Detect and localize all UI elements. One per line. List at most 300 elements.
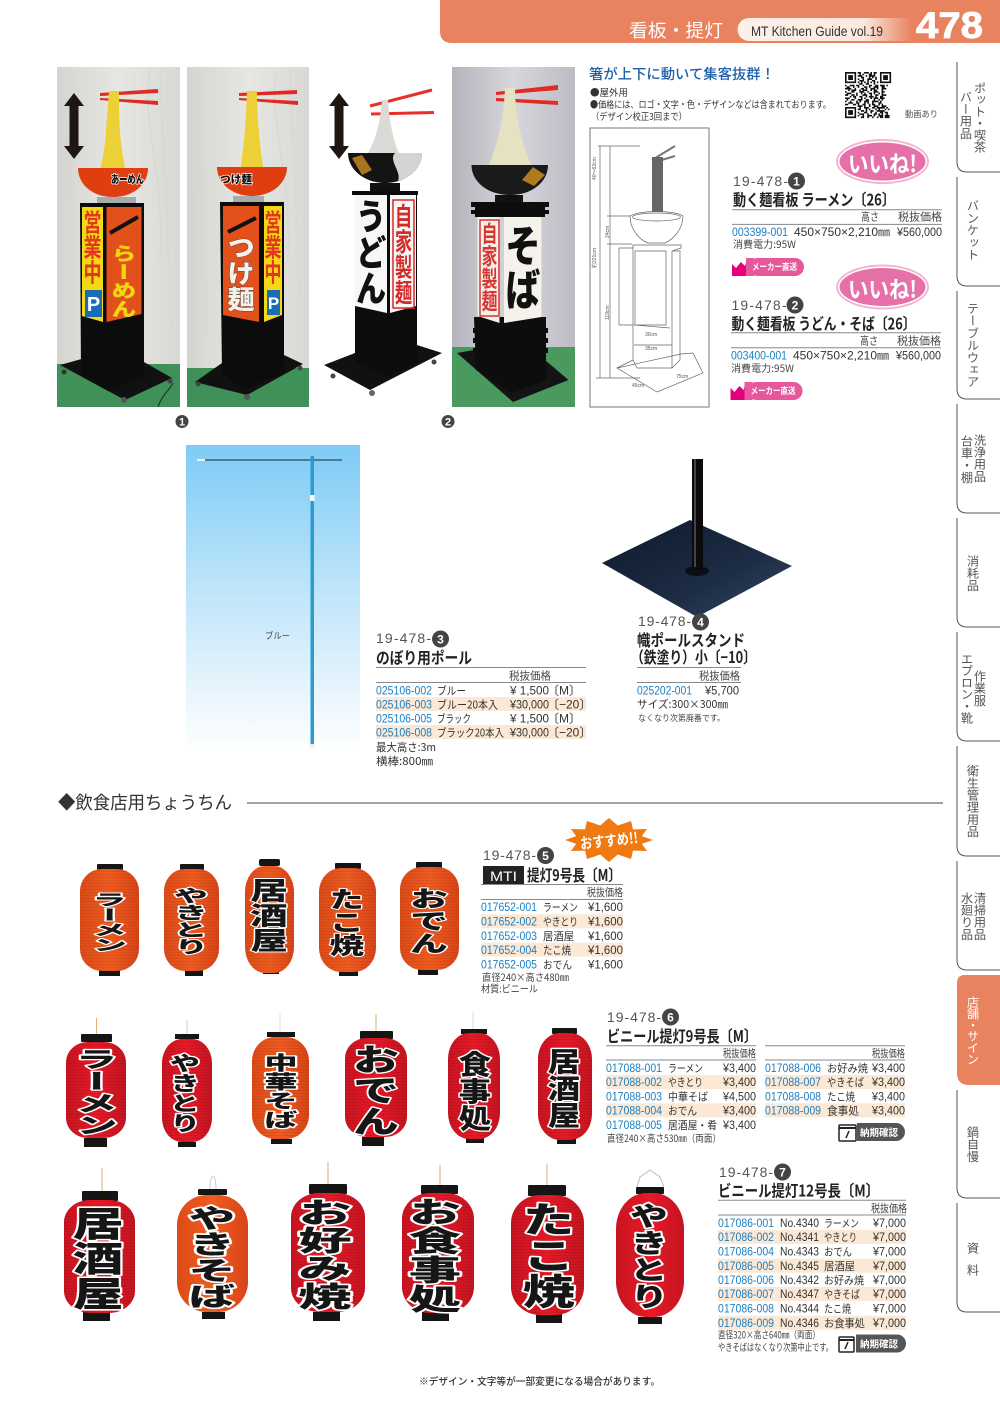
price table left: やきとり [668,1074,703,1090]
chopsticks [370,90,434,114]
item number: 1 [793,174,800,188]
price table: 025202-001 [637,684,692,698]
lantern: izakaya red [538,1028,592,1144]
notes: ●屋外用 [590,85,628,99]
price table: おでん [543,956,572,972]
price table: 003400-001 [731,348,787,362]
bowl [78,168,148,197]
photo: udon sign on white: うどん [349,198,393,306]
price table right: 食事処 [827,1102,859,1118]
price table [732,208,942,251]
notes: （デザイン校正3回まで） [591,109,687,123]
badge: iine 2: いいね! [848,270,917,304]
item number: 7 [779,1166,786,1180]
price table left: ラーメン [668,1060,703,1076]
price table: 017652-003 [481,929,537,943]
marker 1 [176,415,188,428]
price table: お好み焼 [824,1272,864,1288]
notes: ●価格には、ロゴ・文字・色・デザインなどは含まれております。 [590,97,831,111]
product title: 動く麺看板 ラーメン〔26〕 [733,186,895,210]
lantern: yakitori large [616,1170,684,1324]
price table: ¥7,000 [872,1316,906,1330]
lantern: takoyaki large: たこ焼 [511,1201,587,1309]
chopsticks [496,85,558,105]
item number: 19-478- [719,1164,773,1180]
price table left: 税抜価格 [723,1045,756,1061]
price table: No.4340 [780,1216,819,1230]
price table: ¥1,600 [587,900,623,914]
delivery check badge [839,1123,905,1141]
price table: なくなり次第廃番です。 [638,712,725,724]
lantern: shokujidokoro [448,1012,500,1143]
price table: ¥ 1,500 [509,712,549,726]
icon: up-down arrow [64,93,84,159]
item number [376,630,449,648]
lantern: izakaya large [61,1168,135,1321]
lantern: izakaya [242,859,296,974]
lantern: yakisoba: やきそば [178,1205,246,1309]
price table right: ¥3,400 [871,1090,905,1104]
chopsticks [239,90,298,105]
tab: data: 資料 [964,1242,982,1286]
price table: 税抜価格 [587,884,623,900]
price table: ¥7,000 [872,1244,906,1258]
lit panel: soba [504,217,542,323]
item number: 19-478- [732,297,787,313]
photo: udon sign on white: 自家製麺 [391,203,416,305]
price table: ¥7,000 [872,1273,906,1287]
section heading: ◆飲食店用ちょうちん [58,789,232,815]
price table: 最大高さ:3m [376,739,436,755]
lantern row 2 [66,1012,592,1147]
photo: soba sign: そば [498,223,548,311]
price table left: 017088-005 [606,1118,662,1132]
price table: 025106-002 [376,684,432,698]
lantern: ramen [80,864,139,976]
price table [376,668,591,769]
lantern: ramen red: ラーメン [66,1048,128,1136]
price table: 税抜価格 [871,1200,907,1216]
lantern: oden red: おでん [342,1044,410,1136]
price table right: ¥3,400 [871,1061,905,1075]
bowl [472,165,548,195]
lantern: takoyaki [319,863,376,976]
price table: No.4347 [780,1287,819,1301]
lantern: oden: おでん [402,887,456,955]
price table left: おでん [668,1102,697,1118]
price table: ¥7,000 [872,1216,906,1230]
bowl [217,167,287,196]
price table: 017086-001 [718,1216,774,1230]
price table: ブルー20本入 [437,696,498,712]
price table left: ¥3,400 [722,1061,756,1075]
rotated dimension labels: 45cm [632,383,644,389]
photo: udon sign on white [324,90,442,396]
price table: おでん [824,1244,852,1260]
photo: ramen sign side: 営業中 [261,209,285,285]
product 3 [376,630,591,769]
base plate [195,355,303,395]
noodles [241,91,263,167]
price table: やきそば [824,1286,860,1302]
recommended starburst: おすすめ!! [579,827,639,854]
lantern: oshokujidokoro: お食事処 [397,1197,473,1313]
photo: banner pole [186,445,360,752]
lantern row 3 [61,1162,684,1324]
price table: No.4346 [780,1316,819,1330]
lantern: yakitori red [162,1020,212,1147]
tab: pot and bar: ポット・喫茶 [971,81,989,152]
delivery check badge: 納期確認 [860,1125,898,1139]
price table right: 税抜価格 [872,1045,905,1061]
price table: 003399-001 [732,225,788,239]
item number: 19-478- [607,1009,661,1025]
photo: ramen sign side [187,67,309,407]
maker direct badge [732,258,804,276]
tab: apron: エプロン・靴 [958,653,976,723]
price table: 消費電力:95W [731,360,794,375]
tab: consumables: 消耗品 [964,554,982,591]
guide name pill [738,18,912,41]
price table: 017086-002 [718,1230,774,1244]
spec note: 直径240×高さ530㎜（両面） [607,1130,721,1145]
recommended starburst [565,818,653,862]
price table: ¥560,000 [896,225,942,239]
product 4 [631,613,756,724]
price table: 017086-004 [718,1244,774,1258]
price table: ブラック20本入 [437,724,504,740]
white panel: homemade noodles [390,195,416,313]
price table right: 017088-008 [765,1090,821,1104]
price table: 〔M〕 [547,684,581,698]
maker direct badge [730,382,802,400]
item number: 4 [697,616,704,630]
chopsticks [100,89,158,105]
lantern: okonomiyaki: お好み焼 [287,1198,363,1310]
price table: ¥1,600 [587,914,623,928]
spec notes: やきそばはなくなり次第中止です。 [718,1339,833,1354]
orange panel [106,207,142,322]
product title [631,627,756,668]
lantern: ramen: ラーメン [85,892,135,952]
price table: ¥30,000 [509,726,549,740]
price table: 税抜価格 [699,668,740,684]
column [80,203,144,391]
tab: cleaning: 水廻り品 [958,891,976,940]
lantern: izakaya: 居酒屋 [242,878,296,953]
item number: 2 [792,298,799,312]
tab: consumables [957,518,1000,627]
base plate [60,358,172,400]
price table: No.4341 [780,1230,819,1244]
photo: soba sign [452,67,575,407]
product 7 [718,1164,907,1354]
section title: 看板・提灯 [629,17,723,43]
price table: No.4345 [780,1259,819,1273]
stepped column [471,202,549,393]
MTI label [483,866,524,884]
tab: pot and bar [957,62,1000,172]
photo: ramen sign front: 営業中 [80,210,105,285]
product title: 幟ポールスタンド [637,627,745,651]
price table: ラーメン [824,1215,859,1231]
notes [590,85,831,123]
price table left: 017088-001 [606,1061,662,1075]
photo: ramen sign front: あーめん [111,171,144,187]
tab: washing: 洗浄用品 [971,433,989,482]
price table [637,668,740,724]
price table left: ¥4,500 [722,1090,756,1104]
price table [718,1200,907,1331]
maker direct badge: メーカー直送 [750,384,796,397]
tab: data [957,1203,1000,1312]
lantern: chuka soba: 中華そば [257,1053,305,1129]
tab: hygiene: 衛生管理用品 [964,764,982,838]
spec notes: 材質:ビニール [481,980,538,996]
price table left [606,1045,756,1133]
lantern: takoyaki: たこ焼 [322,888,372,957]
lantern: izakaya red: 居酒屋 [540,1047,588,1129]
tab: store signs active: 店舗・サイン [964,996,982,1064]
badge: iine 1 [836,139,929,184]
item number: 19-478- [376,630,431,646]
tab: tableware: テーブルウェア [964,302,982,388]
product title: （鉄塗り）小〔−10〕 [631,644,756,668]
price table: 居酒屋 [543,928,574,944]
rotated dimension labels [591,157,688,389]
price table: サイズ:300×300㎜ [637,696,728,712]
product 2 [730,296,941,400]
price table right: ¥3,400 [871,1075,905,1089]
tab: cleaning [957,861,1000,970]
tab: tableware [957,291,1000,399]
price table: 017652-002 [481,914,537,928]
price table: 税抜価格 [897,332,941,348]
footer note: ※デザイン・文字等が一部変更になる場合があります。 [419,1373,660,1388]
tab: cleaning: 清掃用品 [971,891,989,940]
product title: のぼり用ポール [376,644,472,668]
price table: やきとり [824,1229,857,1245]
price table: 450×750×2,210㎜ [794,225,890,239]
lantern row 1 [80,859,459,976]
chopsticks [652,146,675,162]
item number: 19-478- [733,173,788,189]
lantern: shokujidokoro: 食事処 [451,1050,499,1132]
badge: iine 2 [836,264,929,310]
price table left: 017088-003 [606,1090,662,1104]
lantern: takoyaki large [511,1164,587,1323]
price table: 税抜価格 [898,208,942,224]
photo: ramen sign front: らーめん [106,244,142,318]
rotated dimension labels: 40〜62cm [592,157,598,180]
price table: ブラック [437,710,471,726]
badge: iine 1: いいね! [848,145,917,179]
photo: soba sign: 自家製麺 [478,222,501,312]
item number: 5 [542,849,549,863]
base outline [617,353,703,392]
icon: up-down arrow [329,93,349,159]
product title: ビニール提灯9号長〔M〕 [607,1023,757,1047]
tab: washing: 台車・棚 [958,433,976,484]
price table: 横棒:800㎜ [376,753,433,769]
price table: ¥ 1,500 [509,684,549,698]
spec notes [718,1326,833,1354]
header bar [440,0,1000,46]
spec notes: 直径320×高さ640㎜（両面） [718,1326,820,1342]
price table: 017086-006 [718,1273,774,1287]
price table left: 居酒屋・肴 [668,1117,717,1133]
price table left: 中華そば [668,1088,708,1104]
rotated dimension labels: 35cm [645,346,657,352]
price table left: ¥3,400 [722,1118,756,1132]
item number [638,613,709,630]
orange panel [223,206,259,322]
noodles [652,157,663,223]
tab: washing [957,404,1000,513]
QR code [845,72,891,118]
price table: ラーメン [543,899,578,915]
product title: 動く麺看板 うどん・そば〔26〕 [732,310,916,334]
noodles [101,91,125,168]
rotated dimension labels: 75cm [676,374,688,380]
price table: 017652-001 [481,900,537,914]
price table: 017652-005 [481,958,537,972]
price table: 025106-008 [376,726,432,740]
tab: banquet: バンケット [964,200,982,260]
price table [481,884,623,972]
item number: 3 [437,632,444,646]
price table: ¥7,000 [872,1302,906,1316]
noodles [488,88,532,167]
price table: やきとり [543,914,578,930]
price table: 消費電力:95W [733,236,796,251]
rotated dimension labels: 119cm [605,305,611,320]
price table right: 017088-007 [765,1075,821,1089]
lantern: yakisoba [177,1176,248,1319]
price table right: お好み焼 [827,1060,868,1076]
product title: 提灯9号長〔M〕 [527,862,621,886]
price table: たこ焼 [824,1300,851,1316]
marker 2: 2 [445,416,451,428]
price table: 高さ [860,332,878,348]
photo: ramen sign side: つけ麺 [221,234,261,313]
tab: nabe: 鍋自慢 [964,1125,982,1163]
lantern: yakitori large: やきとり [622,1202,676,1310]
price table: ¥1,600 [587,943,623,957]
price table right: ¥3,400 [871,1104,905,1118]
price table: ¥7,000 [872,1230,906,1244]
price table: お食事処 [824,1315,865,1331]
item number: 19-478- [638,613,691,629]
price table left: 017088-002 [606,1075,662,1089]
price table right: やきそば [827,1074,864,1090]
price table: ¥30,000 [509,698,549,712]
price table: 高さ [861,208,879,224]
lantern: ramen red [66,1018,128,1147]
yellow panel [82,207,103,322]
price table left: ¥3,400 [722,1075,756,1089]
price table: 居酒屋 [824,1258,855,1274]
price table: ¥1,600 [587,958,623,972]
lantern: oden [400,862,459,975]
rotated dimension labels: 約221cm [591,248,598,268]
price table: ¥5,700 [704,684,739,698]
price table: 017086-009 [718,1316,774,1330]
lantern: izakaya large: 居酒屋 [61,1205,135,1311]
price table: 025106-003 [376,698,432,712]
product 5 [481,847,623,996]
tab: nabe [957,1090,1000,1198]
price table: No.4344 [780,1302,819,1316]
tab: apron: 作業服 [971,669,989,707]
price table left: ¥3,400 [722,1104,756,1118]
caption: blue: ブルー [265,629,290,642]
price table: 〔−20〕 [547,726,591,740]
rotated dimension labels: 30cm [645,332,657,338]
spec notes [481,969,569,996]
price table: 〔M〕 [547,712,581,726]
bowl [348,153,422,183]
tagline: 箸が上下に動いて集客抜群！ [589,64,775,84]
noodles [368,100,399,153]
price table: 017086-008 [718,1302,774,1316]
spec notes: 直径240×高さ480㎜ [482,969,569,984]
tab: pot and bar: バー用品 [957,91,975,139]
price table [731,332,941,375]
item number: 19-478- [483,847,536,863]
photo: ramen sign side: つけ麺 [220,171,252,187]
price table: 450×750×2,210㎜ [793,348,889,362]
price table right: 017088-009 [765,1104,821,1118]
column outline [633,245,681,368]
price table: 税抜価格 [509,668,551,684]
yellow panel [264,206,282,322]
delivery check badge [839,1334,906,1352]
price table right [765,1045,905,1118]
tab: apron [957,632,1000,741]
dimension drawing [590,128,709,407]
tab: store signs active [957,975,1000,1085]
price table: ¥1,600 [587,929,623,943]
photo: pole stand [602,459,792,617]
price table: 017086-007 [718,1287,774,1301]
price table: 017086-005 [718,1259,774,1273]
column [352,191,418,376]
price table right: たこ焼 [827,1088,855,1104]
column [220,202,284,390]
price table: No.4343 [780,1244,819,1258]
lantern: okonomiyaki [287,1162,365,1321]
price table left: 017088-004 [606,1104,662,1118]
item number: 6 [667,1010,674,1024]
MTI label: MTI [490,868,517,884]
dimension lines [596,146,640,378]
product 1 [732,172,942,276]
price table: ブルー [437,682,466,698]
video note: 動画あり [905,108,938,120]
guide name pill: MT Kitchen Guide vol.19 [751,23,883,39]
white panel: udon [355,195,387,313]
delivery check badge: 納期確認 [860,1336,898,1350]
price table: たこ焼 [543,942,571,958]
lantern: yakitori red: やきとり [163,1053,207,1133]
maker direct badge: メーカー直送 [752,260,797,273]
lantern: yakitori: やきとり [166,887,216,955]
marker 1: 1 [179,416,185,428]
price table right: 017088-006 [765,1061,821,1075]
photo: ramen sign front: P [87,294,100,316]
base plate [324,345,442,390]
